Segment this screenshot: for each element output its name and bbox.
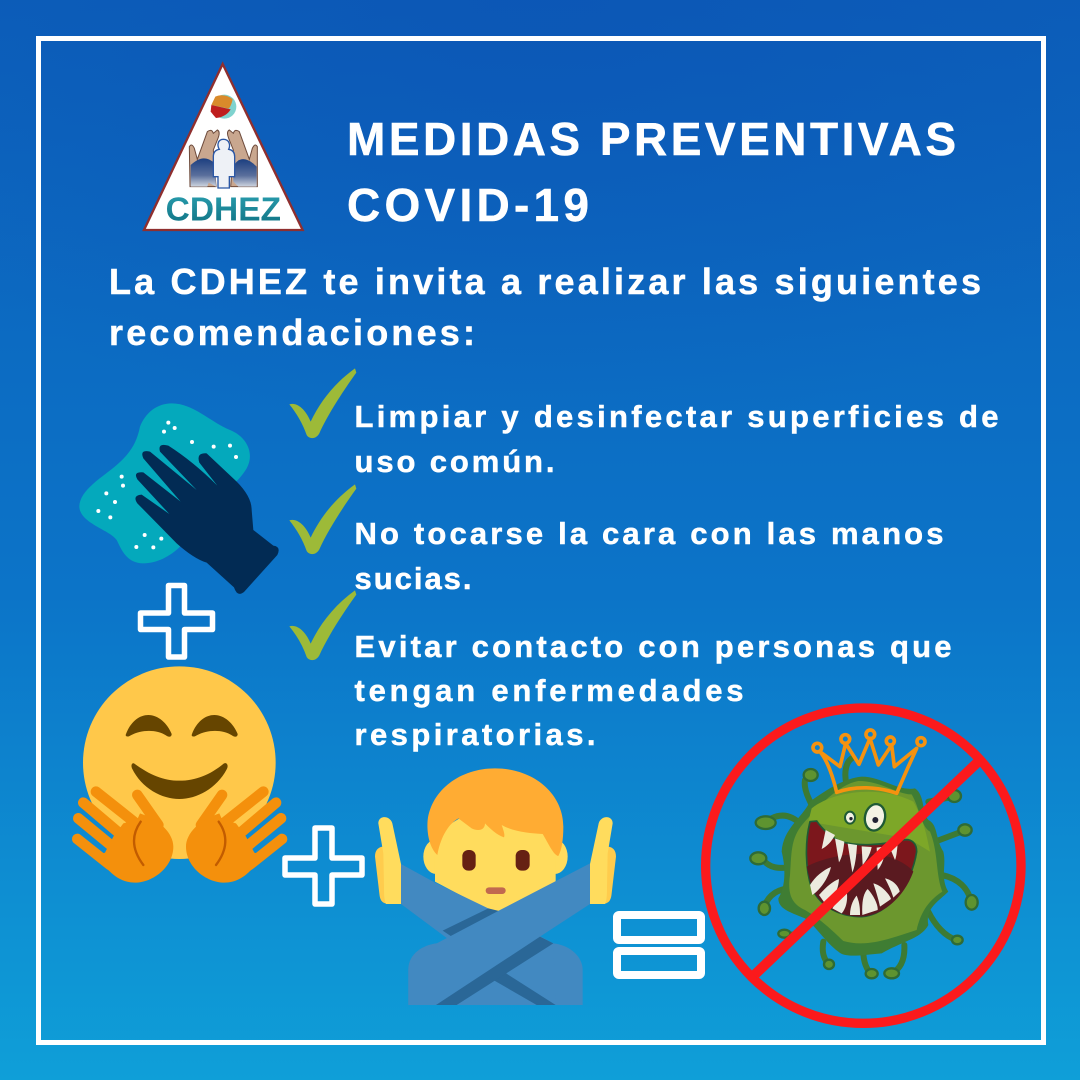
recommendation 3: tengan enfermedades: [354, 673, 744, 708]
check mark 1: [289, 368, 356, 438]
recommendation 1: Limpiar y desinfectar superficies de: [354, 399, 998, 434]
recommendation 3: [354, 629, 952, 752]
icon: plus 1: [140, 586, 212, 657]
icon: plus 2: [285, 828, 362, 904]
logo: CDHEZ triangle: CDHEZ: [166, 192, 281, 229]
check mark 2: [289, 484, 356, 554]
icon: crowned virus with prohibition sign: [706, 708, 1021, 1023]
recommendation 1: [354, 399, 998, 479]
title: [347, 113, 956, 231]
recommendation 1: uso común.: [354, 444, 554, 479]
icon: gloved hand wiping: [79, 403, 279, 594]
recommendation 2: sucias.: [354, 561, 472, 596]
intro text: recomendaciones:: [109, 312, 475, 353]
icon: hugging face emoji: [77, 666, 282, 883]
intro text: [109, 261, 981, 353]
recommendation 3: Evitar contacto con personas que: [354, 629, 952, 664]
title: COVID-19: [347, 179, 589, 231]
intro text: La CDHEZ te invita a realizar las siguientes: [109, 261, 981, 302]
recommendation 2: [354, 516, 944, 596]
logo: CDHEZ triangle: [144, 64, 303, 230]
check mark 3: [289, 590, 356, 660]
title: MEDIDAS PREVENTIVAS: [347, 113, 956, 165]
recommendation 2: No tocarse la cara con las manos: [354, 516, 944, 551]
icon: equals sign: [617, 915, 701, 975]
icon: person crossing arms: [375, 768, 616, 1005]
recommendation 3: respiratorias.: [354, 717, 596, 752]
